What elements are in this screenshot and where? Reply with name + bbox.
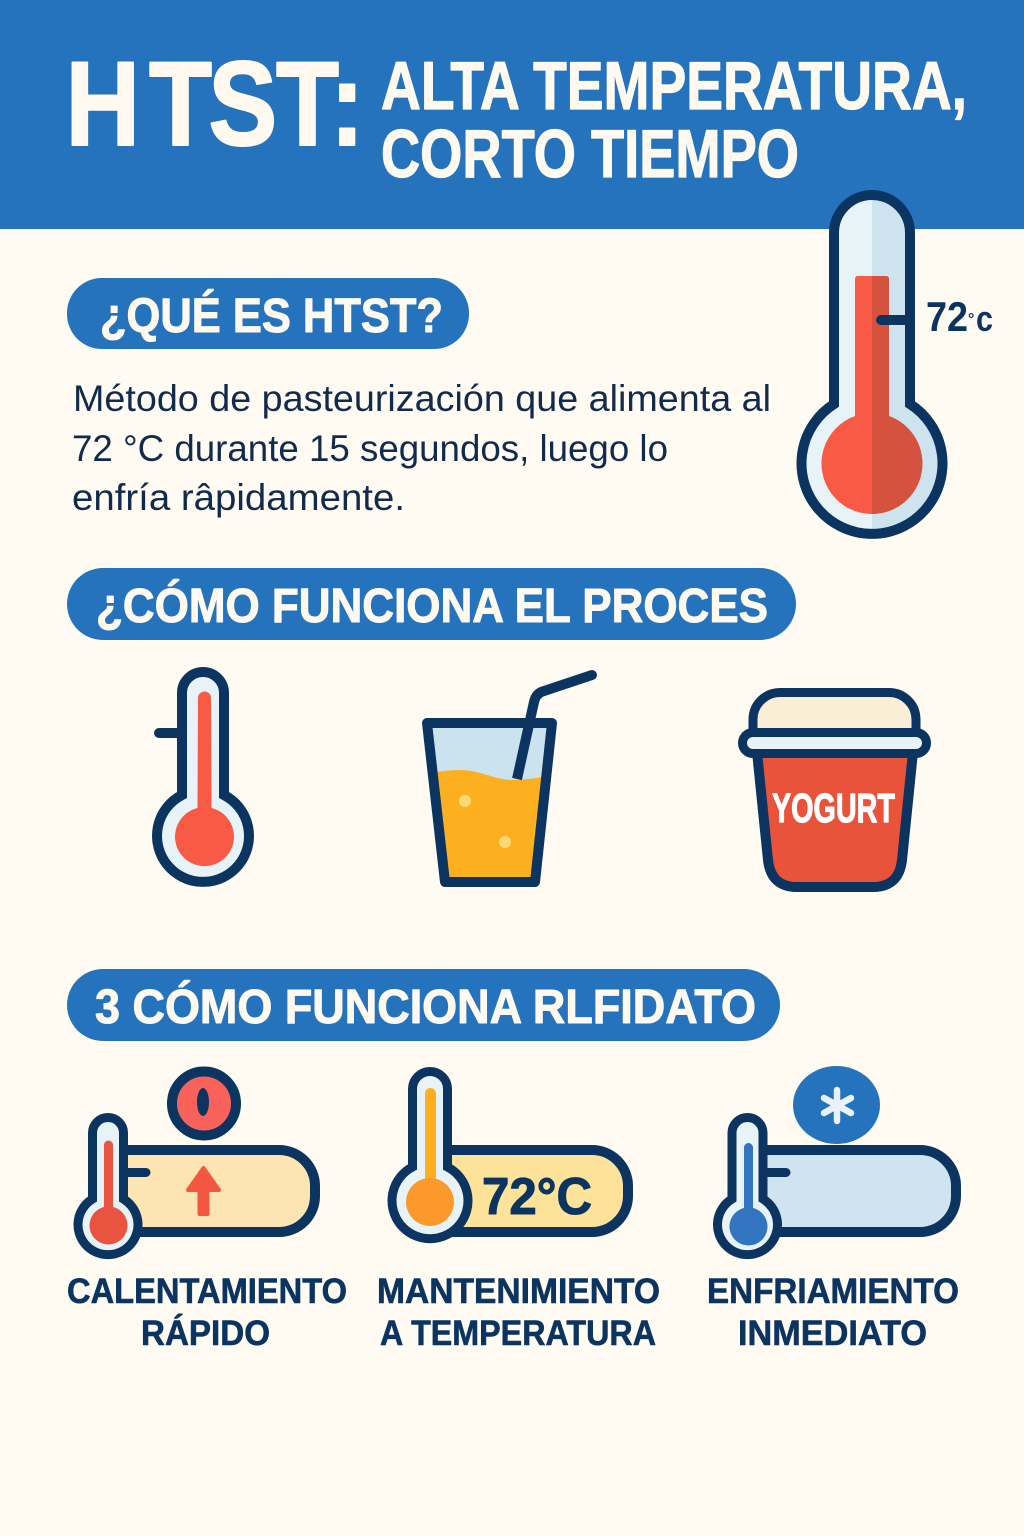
step 1: rapid heating xyxy=(78,1072,315,1255)
pill heading: que es xyxy=(67,278,469,349)
step labels: RÁPIDO xyxy=(141,1313,270,1353)
icon: juice glass xyxy=(427,670,597,882)
icon: yogurt cup xyxy=(742,692,926,887)
description text: 72 °C durante 15 segundos, luego lo xyxy=(72,428,668,469)
step labels: A TEMPERATURA xyxy=(380,1314,656,1353)
description text: Método de pasteurización que alimenta al xyxy=(73,378,771,419)
icon: yogurt cup: YOGURT xyxy=(772,785,895,831)
step 2: holding temperature xyxy=(392,1072,628,1239)
large thermometer 72°C: ° xyxy=(968,311,974,328)
header banner: CORTO TIEMPO xyxy=(381,116,799,192)
step 2: holding temperature: 72°C xyxy=(482,1168,592,1226)
step labels: CALENTAMIENTO xyxy=(67,1272,347,1311)
description text: enfría râpidamente. xyxy=(72,477,405,518)
step 3: immediate cooling xyxy=(718,1066,956,1255)
pill heading: resultado: 3 CÓMO FUNCIONA RLFIDATO xyxy=(95,979,756,1034)
step labels: MANTENIMIENTO xyxy=(377,1272,660,1311)
step labels: ENFRIAMIENTO xyxy=(707,1272,959,1311)
icon: thermometer xyxy=(157,672,249,882)
large thermometer 72°C: 72 xyxy=(926,293,968,340)
header banner: HTST: xyxy=(66,37,364,171)
pill heading: que es: ¿QUÉ ES HTST? xyxy=(100,289,443,343)
large thermometer 72°C: c xyxy=(976,298,993,339)
description text xyxy=(72,378,771,518)
pill heading: resultado xyxy=(67,969,780,1041)
pill heading: como funciona: ¿CÓMO FUNCIONA EL PROCES xyxy=(96,578,768,633)
large thermometer 72°C xyxy=(802,195,993,534)
header banner xyxy=(0,0,1024,229)
step labels: INMEDIATO xyxy=(738,1314,927,1353)
pill heading: como funciona xyxy=(67,568,796,640)
step labels xyxy=(67,1272,959,1353)
